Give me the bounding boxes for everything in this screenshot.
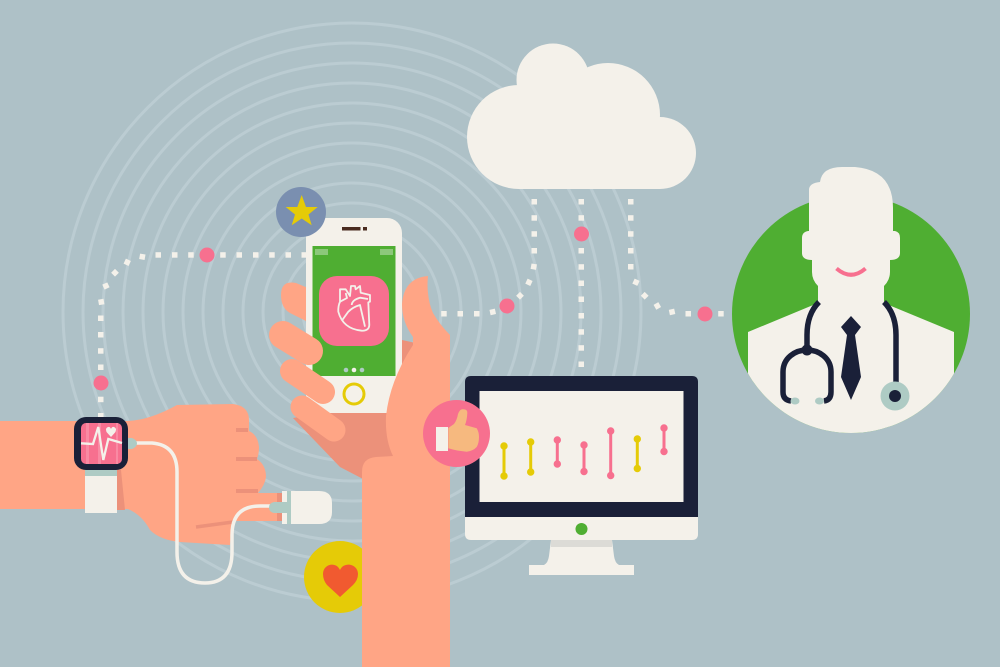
- stand: [529, 540, 634, 575]
- watch screen: [81, 423, 122, 464]
- connector nodes: [94, 226, 712, 390]
- left arm and fist: [0, 404, 282, 545]
- green circle: [732, 195, 970, 433]
- chest piece: [880, 382, 910, 410]
- icon: star badge: [276, 187, 326, 237]
- screen: [480, 391, 684, 502]
- connector: [127, 438, 137, 449]
- smile: [836, 268, 866, 275]
- page dots: [344, 368, 348, 372]
- home button: [344, 384, 364, 404]
- ECG line: [81, 427, 122, 460]
- monitor: [465, 376, 698, 575]
- case: [74, 417, 128, 470]
- phone: [306, 218, 402, 413]
- icon: yellow heart badge: [304, 541, 376, 613]
- white coat: [748, 303, 954, 440]
- hand: fingers over phone: [283, 335, 334, 430]
- head and neck: [802, 167, 900, 330]
- hand: finger behind phone: [281, 282, 308, 322]
- dot-range chart: [502, 426, 666, 478]
- hand holding phone: palm shadow: [293, 340, 425, 480]
- speaker: [342, 227, 360, 230]
- stethoscope: [783, 302, 896, 401]
- finger sensor: [269, 491, 332, 524]
- dotted connector: watch to phone: [98, 252, 307, 418]
- tie: [841, 316, 861, 400]
- strap: [85, 470, 117, 513]
- body: [465, 517, 698, 540]
- smartwatch: [74, 417, 137, 513]
- app icon: heart: [319, 276, 389, 346]
- phone screen: [312, 246, 396, 376]
- icon: cloud: [467, 44, 696, 189]
- knuckle creases: [236, 428, 248, 432]
- cable: [135, 443, 272, 583]
- dotted connector: cloud to monitor: [578, 199, 584, 367]
- watch heart: [106, 427, 116, 437]
- ear tips: [790, 398, 800, 404]
- power light: [576, 523, 588, 535]
- doctor avatar: [732, 167, 970, 440]
- dotted connector: cloud to doctor: [628, 199, 724, 316]
- dotted connector: phone to cloud: [441, 199, 537, 316]
- hand: thumb and arm: [362, 276, 450, 667]
- icon: thumbs up badge: [423, 400, 490, 467]
